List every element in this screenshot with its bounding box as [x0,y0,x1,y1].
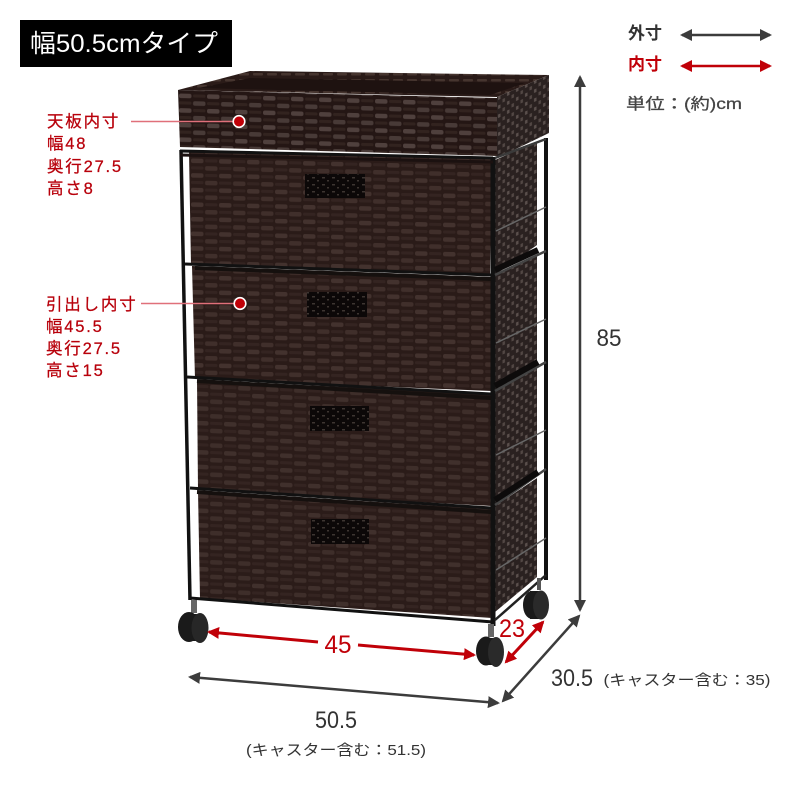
dimension: inner width 45: 45 [324,631,352,659]
legend: inner dimension: 内寸 [628,55,662,74]
dimension: outer width 50.5: (キャスター含む：51.5) [246,742,426,759]
drawer 2 [192,256,537,394]
callout: drawer inner size: 奥行27.5 [46,339,122,358]
drawer 3 [197,368,537,506]
dimension: outer width 50.5 [190,677,498,759]
caster: front right [476,624,504,667]
title badge [20,20,232,67]
legend [626,24,770,113]
handle 2 [307,292,367,317]
dimension: outer depth 30.5: (キャスター含む：35) [604,672,770,689]
back frame post [544,138,548,580]
title badge: 幅50.5cmタイプ [30,30,218,58]
dimension: inner width 45 [209,631,474,659]
dimension: outer depth 30.5: 30.5 [551,665,593,692]
unit note: 単位：(約)cm [626,95,742,113]
callout: drawer inner size: 引出し内寸 [46,295,138,314]
metal frame [180,139,546,626]
caster: front left [178,600,208,643]
handle 1 [305,174,365,198]
dimension: outer depth 30.5 [503,616,770,701]
drawer 1 [189,142,537,275]
caster: back right [523,578,549,620]
callout: top tray inner size [47,112,245,198]
handle 3 [310,406,369,431]
legend: outer dimension: 外寸 [628,24,662,43]
callout: drawer inner size: 幅45.5 [46,317,104,336]
callout: drawer inner size: 高さ15 [46,361,105,380]
callout: top tray inner size: 奥行27.5 [47,157,123,176]
callout: top tray inner size: 幅48 [47,134,87,153]
dimension: outer width 50.5: 50.5 [315,707,357,734]
dimension: inner depth 23 [499,615,543,662]
dimension: height 85: 85 [596,325,622,352]
top tray [178,71,549,158]
callout: drawer inner size [46,295,246,380]
furniture: wicker chest with drawers [178,71,549,667]
dimension: inner depth 23: 23 [499,615,525,643]
drawer 4 [198,478,537,618]
handle 4 [311,519,369,544]
callout: top tray inner size: 高さ8 [47,179,95,198]
callout: top tray inner size: 天板内寸 [47,112,120,131]
